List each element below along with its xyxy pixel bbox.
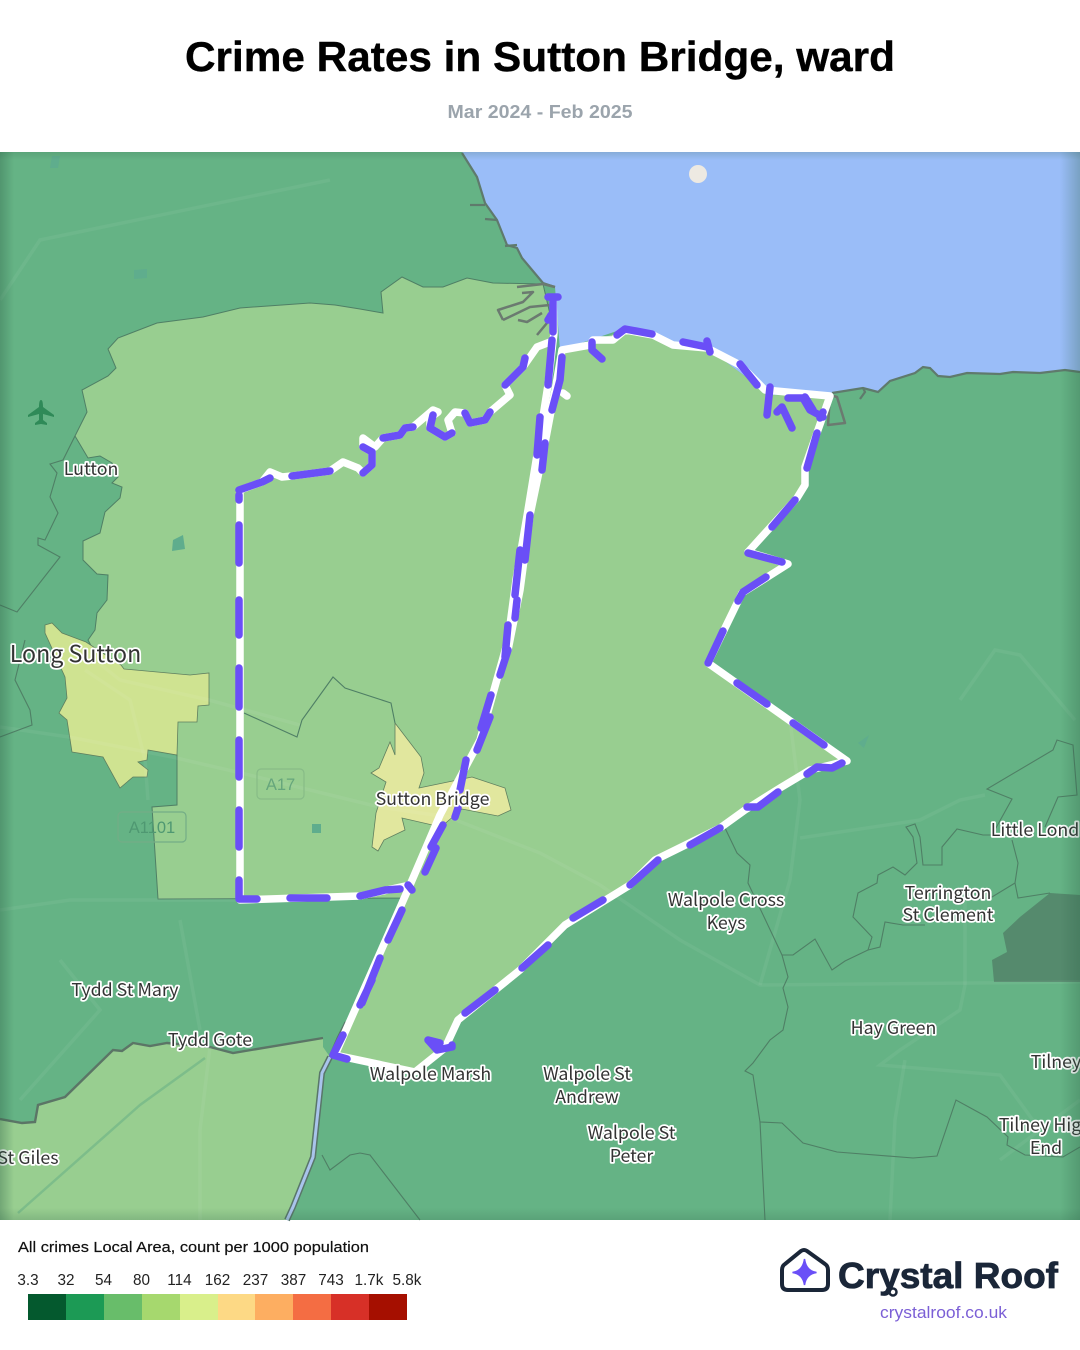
- south-west region boundary: [0, 1038, 323, 1123]
- area: south-west medium-crime region: [0, 1038, 330, 1220]
- legend scale values: 54: [95, 1272, 112, 1289]
- moon marker: [689, 165, 707, 183]
- place labels: [0, 455, 1080, 1170]
- place labels: Lutton: [64, 455, 118, 481]
- A47 road and river channel: [287, 1022, 346, 1220]
- place labels: Long Sutton: [10, 635, 141, 669]
- road shield: A17: A17: [266, 776, 295, 794]
- place labels: Little Lond: [991, 816, 1079, 842]
- website: crystalroof.co.uk: [880, 1304, 1008, 1322]
- road shield: A1101: A1101: [129, 819, 175, 837]
- legend: [17, 1239, 422, 1320]
- place labels: Tydd Gote: [168, 1026, 252, 1052]
- small water features: [50, 156, 869, 833]
- road shield: A17: [257, 769, 304, 799]
- legend scale values: 162: [205, 1272, 230, 1289]
- place labels: Peter: [610, 1142, 653, 1168]
- place labels: Walpole St: [543, 1060, 631, 1086]
- map base: neighbouring low-crime areas: [0, 152, 1080, 1220]
- legend scale values: 1.7k: [355, 1272, 384, 1289]
- logo: Crystal Roof: [782, 1250, 1059, 1322]
- wordmark: Crystal Roof: [838, 1255, 1059, 1296]
- wordmark y-tail dot: [890, 1288, 896, 1296]
- place labels: Tilney Hig: [999, 1111, 1080, 1137]
- icon: house with star: [782, 1250, 828, 1290]
- legend scale values: 237: [243, 1272, 268, 1289]
- legend scale values: 387: [281, 1272, 306, 1289]
- place labels: Walpole St: [588, 1119, 676, 1145]
- place labels: Andrew: [555, 1083, 619, 1109]
- area: Long Sutton: [45, 623, 209, 788]
- legend scale values: 743: [318, 1272, 344, 1289]
- place labels: Hay Green: [851, 1014, 936, 1040]
- place labels: Terrington: [905, 879, 991, 905]
- legend scale values: 5.8k: [393, 1272, 422, 1289]
- place labels: Tydd St Mary: [71, 976, 179, 1002]
- map edge vignette: [0, 152, 1080, 1220]
- place labels: Walpole Cross: [668, 886, 784, 912]
- area: dark low-crime patch: [992, 893, 1080, 982]
- faint road network: [0, 180, 1080, 1220]
- place labels: St Clement: [903, 901, 994, 927]
- place labels: End: [1030, 1134, 1062, 1160]
- ward boundary: east ward white line: [335, 330, 847, 1072]
- area: Sutton Bridge east ward: [335, 332, 847, 1072]
- legend scale values: 32: [57, 1272, 75, 1289]
- ward boundary: purple dashes: [239, 297, 842, 1059]
- legend scale values: 80: [133, 1272, 150, 1289]
- subtitle: date range: Mar 2024 - Feb 2025: [448, 101, 632, 122]
- place labels: Keys: [707, 909, 745, 935]
- area: Sutton Bridge town: [371, 723, 511, 851]
- drain line across south-west region: [18, 1058, 205, 1213]
- legend scale values: 3.3: [17, 1272, 39, 1289]
- legend colour bar: [28, 1294, 407, 1320]
- legend scale values: [17, 1272, 422, 1289]
- place labels: Sutton Bridge: [376, 785, 490, 811]
- internal area boundaries: [0, 436, 1080, 1220]
- icon: airport: [28, 400, 54, 425]
- map: [0, 152, 1080, 1220]
- creek marks at river mouth: [498, 284, 845, 425]
- ward boundary: west ward white line: [240, 298, 554, 900]
- place labels: Walpole Marsh: [370, 1060, 491, 1086]
- area: north-west medium-crime region: [75, 277, 556, 899]
- sea: [462, 152, 1080, 395]
- place labels: Tilney: [1031, 1048, 1080, 1074]
- legend title: All crimes Local Area, count per 1000 population: [18, 1239, 369, 1256]
- legend scale values: 114: [167, 1272, 192, 1289]
- road shield: A1101: [118, 812, 186, 842]
- coastline: [462, 153, 1080, 399]
- title: Crime Rates in Sutton Bridge, ward: [185, 33, 895, 80]
